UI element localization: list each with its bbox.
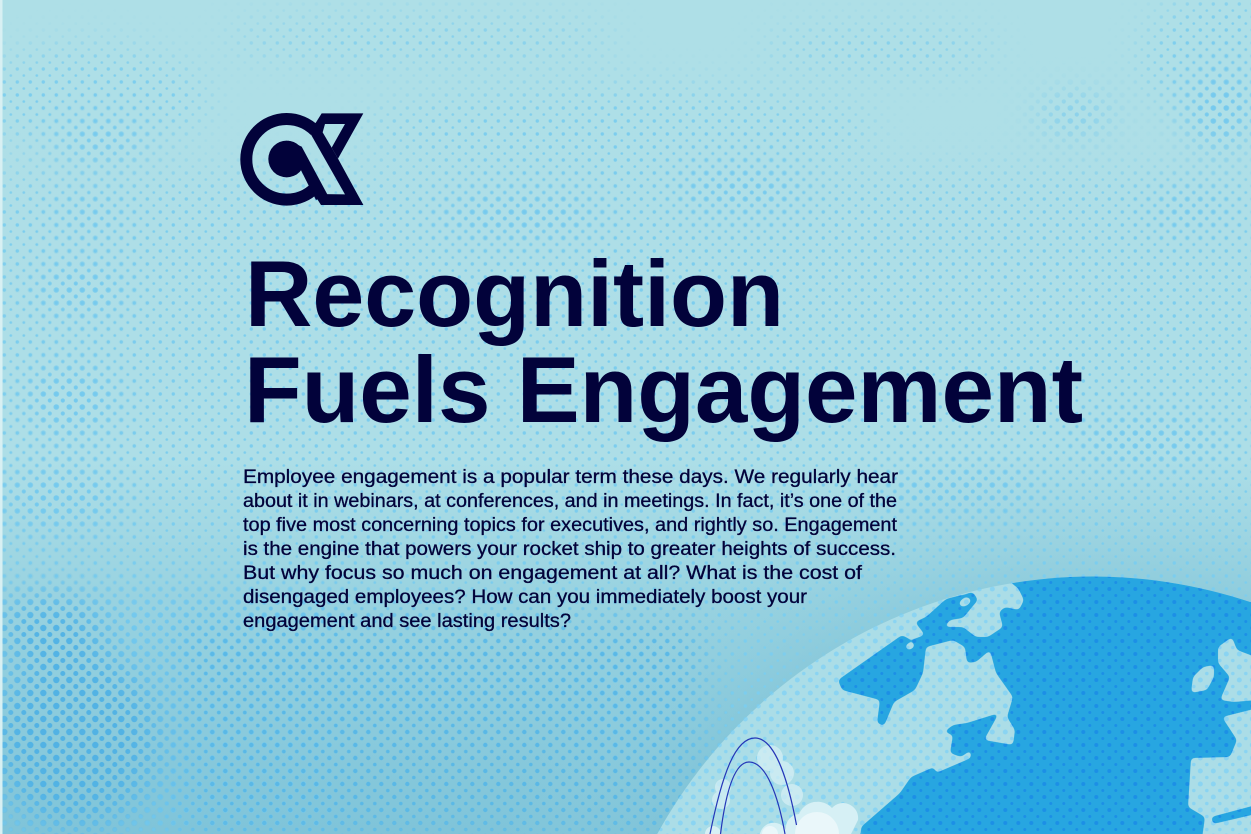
- bright cloud core: [762, 812, 839, 834]
- intro paragraph: engagement and see lasting results?: [243, 610, 571, 632]
- logo bottom bar: [314, 187, 363, 205]
- intro paragraph: about it in webinars, at conferences, and in meetings. In fact, it’s one of the: [243, 490, 897, 512]
- title: Recognition: [245, 241, 784, 346]
- globe land base: [657, 577, 1251, 834]
- logo top chevron: [315, 113, 363, 159]
- faint cloud puffs: [712, 745, 803, 809]
- intro paragraph: [243, 466, 899, 632]
- intro paragraph: disengaged employees? How can you immediately boost your: [243, 586, 808, 608]
- intro paragraph: is the engine that powers your rocket ship to greater heights of success.: [243, 538, 896, 560]
- ocean: [839, 576, 1251, 834]
- logo inner dot and diagonal: [268, 141, 305, 177]
- logo: [246, 113, 363, 205]
- mid cloud: [705, 802, 858, 834]
- title: Fuels Engagement: [244, 337, 1083, 442]
- land halftone: [657, 577, 1251, 834]
- rocket outline arcs: [710, 738, 796, 834]
- title: [244, 241, 1083, 442]
- intro paragraph: Employee engagement is a popular term these days. We regularly hear: [243, 466, 899, 488]
- intro paragraph: But why focus so much on engagement at all? What is the cost of: [243, 562, 863, 584]
- rocket exhaust clouds: [705, 745, 858, 834]
- logo ring: [246, 119, 315, 200]
- logo main diagonal: [309, 123, 363, 205]
- intro paragraph: top five most concerning topics for executives, and rightly so. Engagement: [243, 514, 898, 536]
- globe illustration: [650, 570, 1251, 834]
